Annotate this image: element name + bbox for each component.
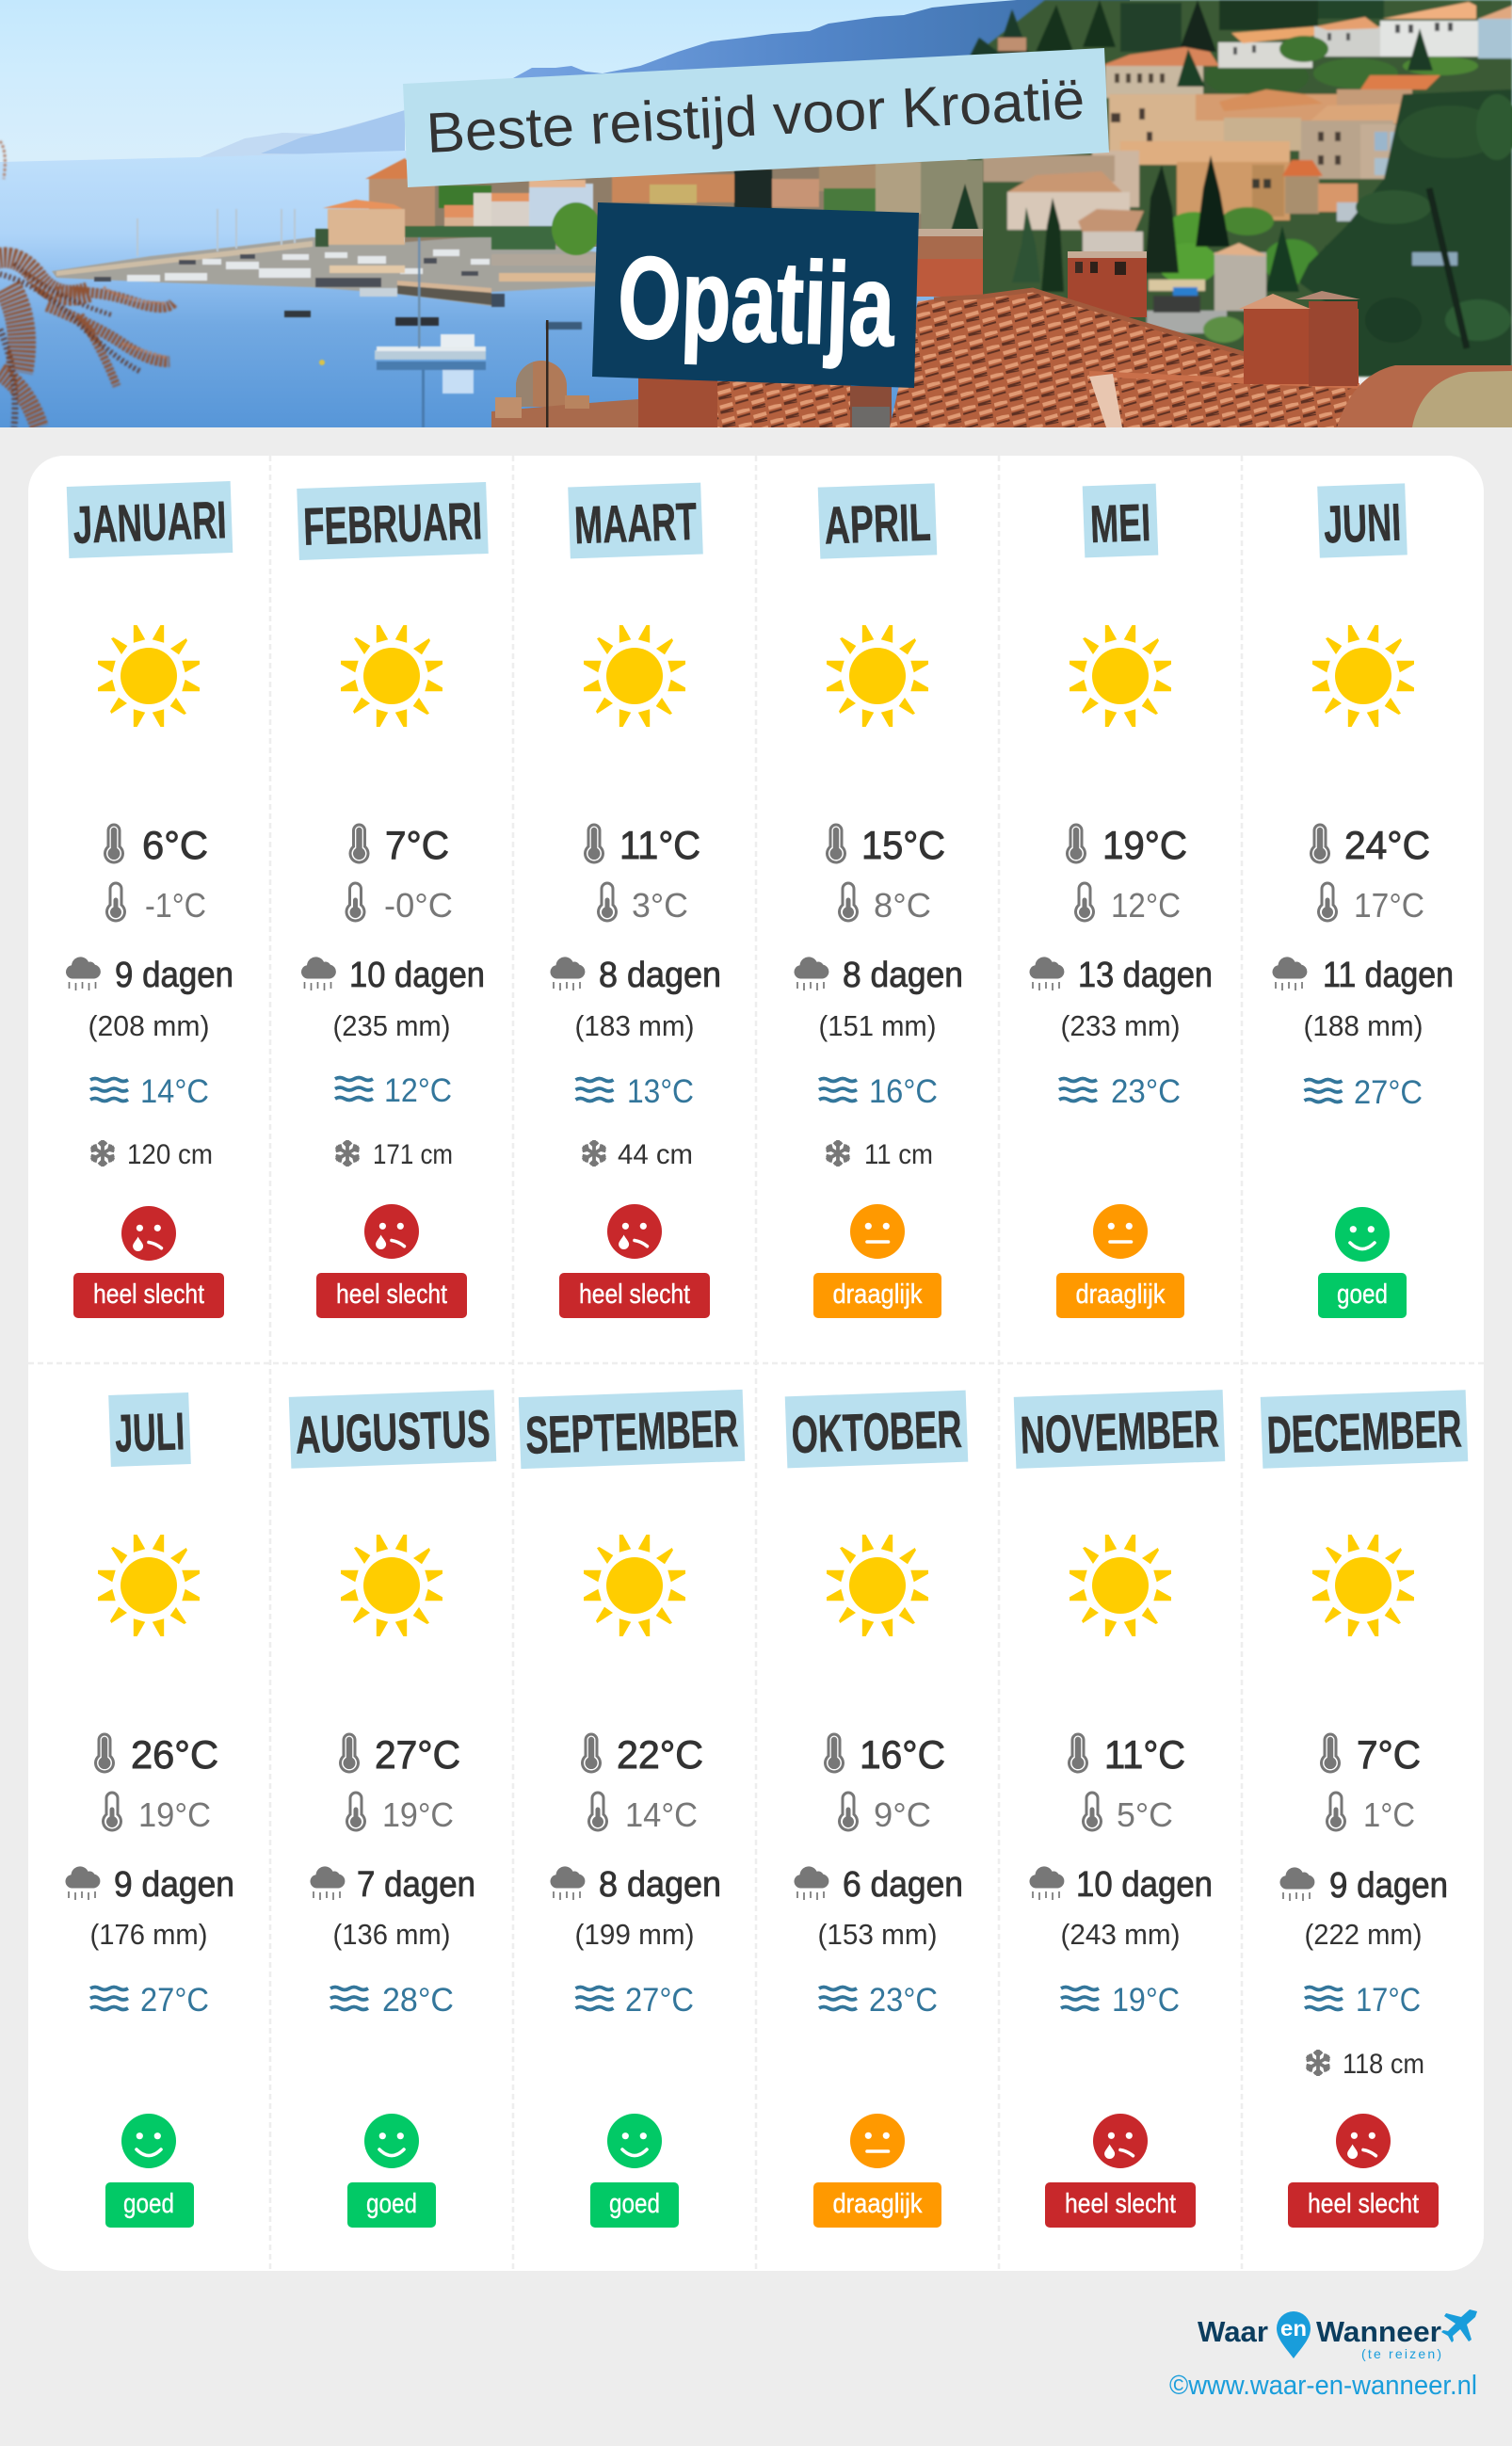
logo: Waar en Wanneer: (te reizen) <box>1361 2346 1441 2361</box>
maximum temperature <box>584 823 700 867</box>
month tag <box>297 482 489 560</box>
rainfall: (208 mm) <box>88 1009 209 1042</box>
snow depth <box>825 1139 933 1170</box>
sea temperature: 23°C <box>869 1982 938 2019</box>
rating label <box>813 1273 941 1318</box>
maximum temperature: 11°C <box>619 823 700 867</box>
sea temperature <box>335 1072 452 1109</box>
month tag: SEPTEMBER <box>524 1398 739 1465</box>
sea temperature: 16°C <box>869 1073 938 1110</box>
minimum temperature <box>1326 1791 1415 1834</box>
rainfall: (136 mm) <box>333 1918 450 1951</box>
month: november <box>1014 1390 1225 2228</box>
month: september <box>519 1390 745 2228</box>
sea temperature: 28°C <box>382 1982 454 2019</box>
rain days: 8 dagen <box>599 956 721 995</box>
rating label: goed <box>366 2189 417 2219</box>
foreground dome, chimneys and roofs <box>516 361 567 407</box>
rating face <box>364 1204 419 1259</box>
white calendar panel <box>28 456 1484 2271</box>
sea temperature <box>1059 1073 1181 1110</box>
sea temperature: 27°C <box>625 1982 694 2019</box>
sea temperature: 17°C <box>1356 1982 1421 2019</box>
rating label: heel slecht <box>93 1279 204 1310</box>
month tag <box>1083 484 1158 557</box>
rating label: goed <box>1337 1279 1388 1310</box>
rating label: heel slecht <box>1065 2189 1176 2219</box>
icon: sun <box>584 625 685 727</box>
rating label: heel slecht <box>579 1279 690 1310</box>
maximum temperature <box>1320 1732 1421 1777</box>
rain days: 11 dagen <box>1323 956 1454 995</box>
month: februari <box>297 482 489 1318</box>
rain days <box>66 956 233 995</box>
month tag: AUGUSTUS <box>295 1398 491 1465</box>
rating label: goed <box>609 2189 660 2219</box>
rating face <box>121 2114 176 2168</box>
rainfall: (176 mm) <box>90 1918 207 1951</box>
maximum temperature <box>1310 823 1430 867</box>
month tag <box>568 483 703 558</box>
sea temperature <box>576 1982 694 2019</box>
rating label <box>105 2182 194 2228</box>
minimum temperature: 19°C <box>382 1795 454 1834</box>
month: augustus <box>289 1390 496 2228</box>
icon: sun <box>98 1535 200 1636</box>
snow depth <box>581 1139 693 1170</box>
rain days <box>65 1865 234 1905</box>
minimum temperature: 3°C <box>632 886 688 925</box>
subtitle banner <box>403 48 1109 187</box>
rain days <box>794 1865 963 1905</box>
rating label: heel slecht <box>336 1279 447 1310</box>
minimum temperature: 17°C <box>1354 886 1424 925</box>
rainfall: (243 mm) <box>1060 1918 1181 1951</box>
rain days: 9 dagen <box>115 956 233 995</box>
logo: Waar en Wanneer: Wanneer <box>1316 2315 1441 2348</box>
minimum temperature <box>597 881 688 925</box>
minimum temperature <box>1317 881 1424 925</box>
rating label <box>73 1273 224 1318</box>
maximum temperature: 15°C <box>861 823 945 867</box>
maximum temperature: 24°C <box>1344 823 1430 867</box>
maximum temperature: 6°C <box>142 823 208 867</box>
rating label <box>1045 2182 1196 2228</box>
maximum temperature: 26°C <box>131 1732 218 1777</box>
month tag: JULI <box>114 1401 185 1463</box>
month tag: FEBRUARI <box>302 491 483 556</box>
rating label: draaglijk <box>832 2189 923 2219</box>
icon: sun <box>827 625 928 727</box>
logo: Waar en Wanneer <box>1198 2309 1477 2361</box>
sea temperature: 23°C <box>1111 1073 1181 1110</box>
minimum temperature: 1°C <box>1363 1795 1415 1834</box>
city title: Opatija <box>616 233 897 371</box>
hero photo: Opatija harbour and town <box>0 0 1512 427</box>
month tag <box>1317 483 1407 558</box>
rainfall: (153 mm) <box>817 1918 938 1951</box>
icon: sun <box>1070 625 1171 727</box>
snow depth: 118 cm <box>1343 2049 1424 2080</box>
city title banner <box>592 202 919 388</box>
rating label <box>590 2182 679 2228</box>
icon: sun <box>584 1535 685 1636</box>
rain days <box>1279 1866 1448 1906</box>
month tag <box>519 1390 745 1469</box>
rain days <box>1029 1865 1213 1905</box>
icon: sun <box>1070 1535 1171 1636</box>
month: juni <box>1272 483 1454 1318</box>
rating label <box>1318 1273 1407 1318</box>
icon: airplane <box>1441 2309 1477 2342</box>
rating face <box>364 2114 419 2168</box>
minimum temperature: 12°C <box>1111 886 1181 925</box>
month tag: APRIL <box>824 492 932 555</box>
website credit: ©www.waar-en-wanneer.nl <box>1169 2371 1477 2401</box>
rating face <box>850 1204 905 1259</box>
sea temperature <box>90 1073 209 1110</box>
icon: sun <box>1312 625 1414 727</box>
rain days <box>310 1865 475 1905</box>
month tag: JUNI <box>1323 492 1402 554</box>
rating face <box>1335 1207 1390 1262</box>
month: januari <box>66 481 233 1318</box>
month tag <box>289 1390 496 1469</box>
month tag: MAART <box>573 491 698 555</box>
minimum temperature: 8°C <box>874 886 931 925</box>
rainfall: (199 mm) <box>574 1918 695 1951</box>
month: april <box>794 483 963 1318</box>
rain days: 10 dagen <box>1076 1865 1213 1905</box>
mid town <box>1109 94 1236 151</box>
rain days: 8 dagen <box>599 1865 721 1905</box>
rain days: 9 dagen <box>114 1865 234 1905</box>
minimum temperature <box>105 881 206 925</box>
month tag <box>108 1392 191 1467</box>
rain days <box>550 956 721 995</box>
rating label <box>813 2182 941 2228</box>
month tag: MEI <box>1089 492 1151 554</box>
minimum temperature <box>1074 881 1181 925</box>
minimum temperature: 19°C <box>138 1795 211 1834</box>
minimum temperature <box>346 1791 454 1834</box>
sea temperature: 12°C <box>384 1072 452 1109</box>
icon: map pin <box>1277 2311 1311 2358</box>
sea temperature: 13°C <box>627 1073 694 1110</box>
minimum temperature: 9°C <box>874 1795 931 1834</box>
month: december <box>1261 1390 1468 2228</box>
sea temperature <box>819 1982 938 2019</box>
sea temperature: 19°C <box>1112 1982 1180 2019</box>
rating face <box>850 2114 905 2168</box>
minimum temperature: 14°C <box>625 1795 698 1834</box>
maximum temperature <box>824 1732 945 1777</box>
month tag: JANUARI <box>72 490 228 555</box>
minimum temperature <box>345 881 453 925</box>
rainfall: (183 mm) <box>574 1009 695 1042</box>
sea temperature: 14°C <box>140 1073 209 1110</box>
rainfall: (151 mm) <box>819 1009 936 1042</box>
minimum temperature: -0°C <box>384 886 453 925</box>
rating label <box>1288 2182 1439 2228</box>
month tag: OKTOBER <box>791 1399 963 1464</box>
rain days: 9 dagen <box>1329 1866 1448 1906</box>
maximum temperature <box>348 823 449 867</box>
maximum temperature <box>826 823 945 867</box>
rating label <box>559 1273 710 1318</box>
logo: Waar en Wanneer: Waar <box>1198 2315 1268 2348</box>
month tag: NOVEMBER <box>1020 1398 1220 1465</box>
sea temperature <box>1061 1982 1180 2019</box>
rain days <box>1029 956 1213 995</box>
minimum temperature: -1°C <box>145 886 206 925</box>
rainfall: (233 mm) <box>1060 1009 1181 1042</box>
rating label <box>316 1273 467 1318</box>
maximum temperature <box>581 1732 703 1777</box>
rating face <box>607 1204 662 1259</box>
minimum temperature <box>102 1791 211 1834</box>
minimum temperature <box>1082 1791 1173 1834</box>
large pine on the right <box>1299 89 1512 377</box>
rain days <box>301 956 485 995</box>
minimum temperature <box>587 1791 698 1834</box>
far trees and buildings <box>969 9 1029 55</box>
maximum temperature: 11°C <box>1104 1732 1185 1777</box>
rating label: goed <box>123 2189 174 2219</box>
rain days: 8 dagen <box>843 956 963 995</box>
marina and boats <box>52 188 598 427</box>
month tag <box>1014 1390 1225 1469</box>
snow depth: 171 cm <box>373 1139 453 1170</box>
rating label: draaglijk <box>832 1279 923 1310</box>
sea temperature <box>1305 1074 1423 1111</box>
sea temperature <box>90 1982 209 2019</box>
sea temperature <box>819 1073 938 1110</box>
rain days: 13 dagen <box>1078 956 1213 995</box>
rainfall: (222 mm) <box>1305 1918 1422 1951</box>
maximum temperature: 16°C <box>860 1732 945 1777</box>
maximum temperature: 7°C <box>385 823 449 867</box>
rating face <box>1336 2114 1391 2168</box>
maximum temperature: 27°C <box>375 1732 460 1777</box>
sea temperature <box>330 1982 454 2019</box>
icon: sun <box>98 625 200 727</box>
month: mei <box>1029 484 1213 1318</box>
month tag <box>67 481 233 558</box>
snow depth: 11 cm <box>864 1139 933 1170</box>
rain days: 6 dagen <box>843 1865 963 1905</box>
month: maart <box>550 483 721 1318</box>
rainfall: (188 mm) <box>1303 1009 1424 1042</box>
rating face <box>121 1206 176 1261</box>
month: oktober <box>785 1391 968 2228</box>
maximum temperature: 7°C <box>1357 1732 1421 1777</box>
rain days: 10 dagen <box>349 956 485 995</box>
pine branch <box>0 141 173 427</box>
icon: sun <box>1312 1535 1414 1636</box>
icon: sun <box>827 1535 928 1636</box>
rating face <box>607 2114 662 2168</box>
rating face <box>1093 2114 1148 2168</box>
seaside houses <box>315 158 983 255</box>
icon: sun <box>341 1535 442 1636</box>
maximum temperature: 19°C <box>1102 823 1187 867</box>
sea temperature <box>1305 1982 1421 2019</box>
maximum temperature <box>1068 1732 1185 1777</box>
logo: Waar en Wanneer: en <box>1280 2316 1307 2341</box>
snow depth <box>1305 2049 1424 2080</box>
icon: sun <box>341 625 442 727</box>
minimum temperature <box>838 881 931 925</box>
subtitle text: Beste reistijd voor Kroatië <box>425 67 1086 165</box>
sea temperature: 27°C <box>1354 1074 1423 1111</box>
rainfall: (235 mm) <box>333 1009 450 1042</box>
month tag <box>785 1391 968 1468</box>
snow depth <box>334 1139 453 1170</box>
snow depth: 120 cm <box>127 1139 213 1170</box>
rating label: heel slecht <box>1308 2189 1419 2219</box>
rain days <box>794 956 963 995</box>
rating label <box>347 2182 436 2228</box>
sea temperature <box>576 1073 694 1110</box>
rating label <box>1056 1273 1184 1318</box>
rain days: 7 dagen <box>357 1865 475 1905</box>
rating label: draaglijk <box>1075 1279 1166 1310</box>
rain days <box>550 1865 721 1905</box>
maximum temperature <box>1066 823 1187 867</box>
maximum temperature: 22°C <box>617 1732 703 1777</box>
month tag <box>818 483 937 559</box>
rain days <box>1272 956 1454 995</box>
snow depth <box>89 1139 213 1170</box>
month: juli <box>65 1392 234 2228</box>
maximum temperature <box>339 1732 460 1777</box>
minimum temperature: 5°C <box>1117 1795 1173 1834</box>
sea temperature: 27°C <box>140 1982 209 2019</box>
maximum temperature <box>104 823 208 867</box>
minimum temperature <box>838 1791 931 1834</box>
rating face <box>1093 1204 1148 1259</box>
snow depth: 44 cm <box>618 1139 693 1170</box>
greenery and cypresses <box>1171 211 1209 247</box>
